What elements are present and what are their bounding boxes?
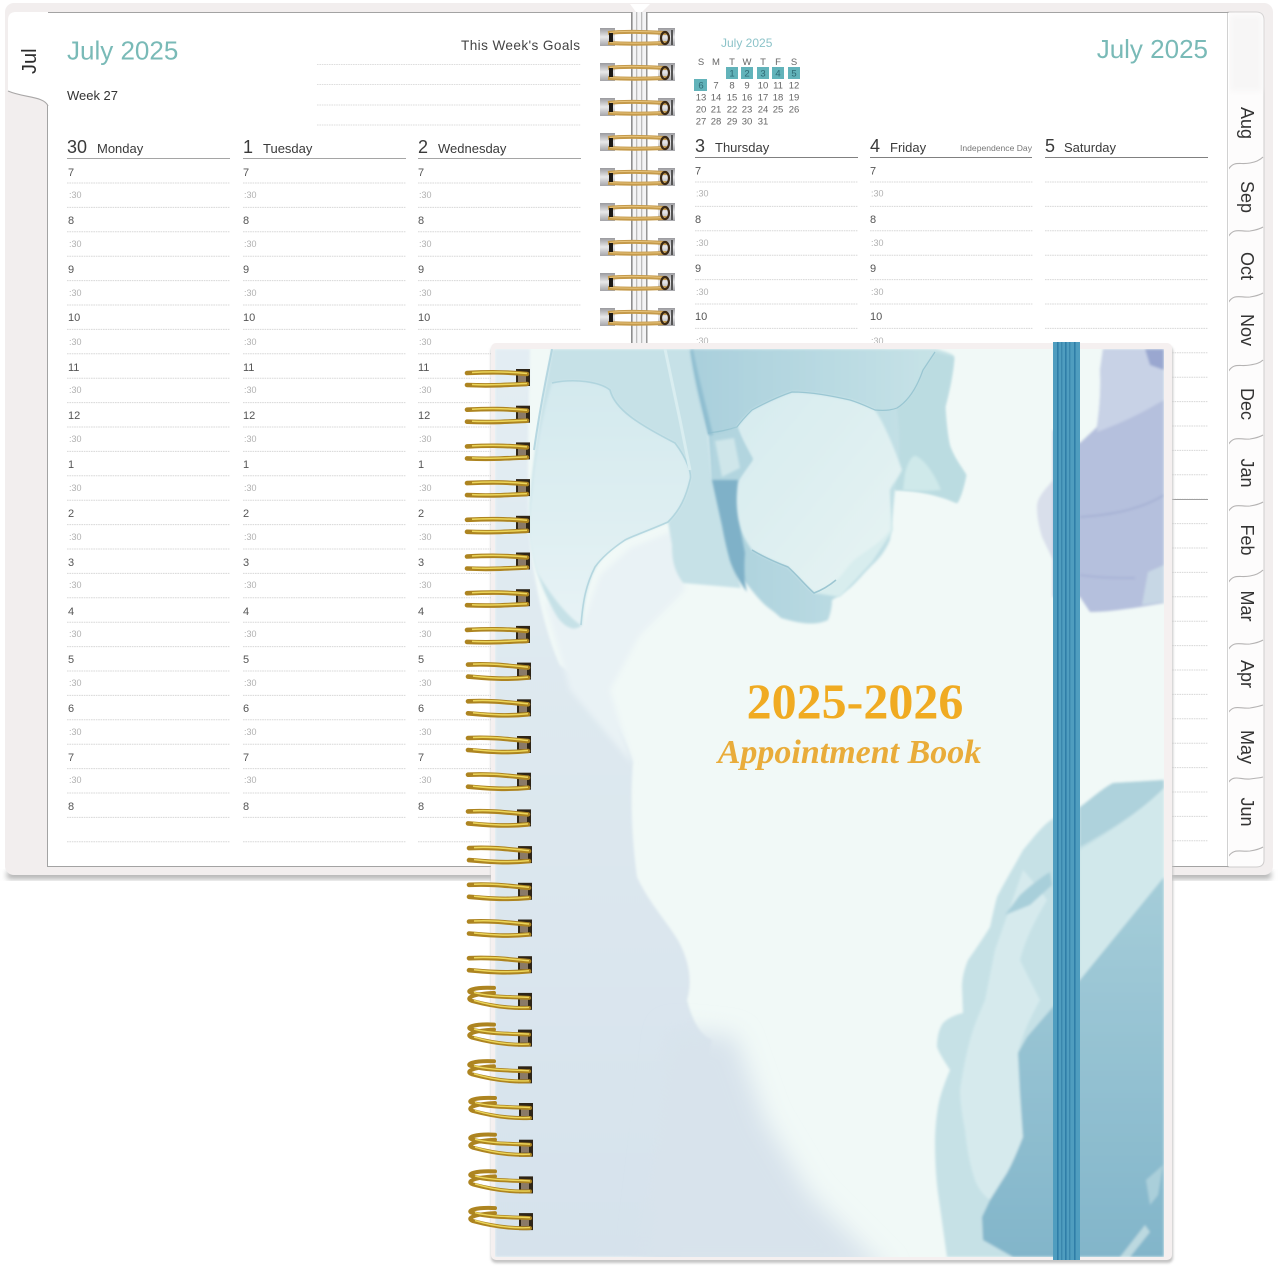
column: Tuesday: :30 (244, 727, 257, 737)
dark teal streak (690, 350, 747, 592)
mini calendar: 30 (742, 116, 752, 128)
Jul tab: Jul (19, 48, 41, 74)
column: Tuesday: 8 (243, 215, 249, 227)
column: Monday: Monday (97, 141, 144, 156)
column: Thursday: :30 (696, 336, 709, 346)
column: Wednesday: :30 (419, 775, 432, 785)
column: Monday: :30 (69, 239, 82, 249)
column: Monday: :30 (69, 727, 82, 737)
mini calendar: 21 (711, 104, 721, 116)
column: Tuesday: Tuesday (263, 141, 313, 156)
column: Monday: 30 (67, 137, 87, 157)
column: Wednesday: 1 (418, 459, 424, 471)
teal wash: central bloom (690, 349, 966, 624)
column: Monday: 4 (68, 606, 74, 618)
column: Tuesday: :30 (244, 288, 257, 298)
column: Thursday: 3 (695, 136, 705, 156)
column: Wednesday: 11 (418, 362, 429, 374)
column: Tuesday: 7 (243, 167, 249, 179)
column: Wednesday: Wednesday (438, 141, 507, 156)
column: Friday: 9 (870, 263, 876, 275)
column: Friday: 4 (870, 136, 880, 156)
tab label: Jan: Jan (1237, 458, 1257, 488)
mini calendar: S (698, 57, 704, 68)
column: Thursday: :30 (696, 188, 709, 198)
mini calendar: 20 (696, 104, 706, 116)
closed planner cover (467, 342, 1173, 1266)
right page (646, 12, 1229, 866)
column: Tuesday: 5 (243, 654, 249, 666)
weekly goals block: This Week's Goals (461, 38, 580, 53)
column: Tuesday: :30 (244, 532, 257, 542)
tab label: Mar: Mar (1237, 590, 1257, 622)
column: Monday: :30 (69, 580, 82, 590)
column: Tuesday: 7 (243, 752, 249, 764)
column: Friday: :30 (871, 336, 884, 346)
column: Wednesday: 3 (418, 557, 424, 569)
column: Thursday: 7 (695, 166, 701, 178)
column: Friday: 8 (870, 214, 876, 226)
mini calendar: 22 (727, 104, 737, 116)
column: Tuesday: 4 (243, 606, 249, 618)
column: Wednesday: :30 (419, 288, 432, 298)
column: Tuesday: :30 (244, 190, 257, 200)
cover subtitle: Appointment Book (716, 734, 981, 771)
planner back cover (5, 3, 1273, 875)
mini calendar: T (729, 57, 735, 68)
column: Monday: :30 (69, 190, 82, 200)
periwinkle wash (1037, 349, 1164, 612)
column: Tuesday: 8 (243, 801, 249, 813)
mini calendar: 23 (742, 104, 752, 116)
column: Wednesday: 12 (418, 410, 430, 422)
mini calendar: July 2025 (721, 36, 773, 50)
column: Wednesday: 2 (418, 137, 428, 157)
column: Friday: Friday (890, 140, 927, 155)
column: Thursday: Thursday (715, 140, 770, 155)
column: Thursday: :30 (696, 238, 709, 248)
column: Monday: 5 (68, 654, 74, 666)
column: Wednesday: :30 (419, 190, 432, 200)
column: Wednesday: 5 (418, 654, 424, 666)
column: Monday: :30 (69, 337, 82, 347)
column: Tuesday: :30 (244, 385, 257, 395)
column: Tuesday: 2 (243, 508, 249, 520)
column: Wednesday: :30 (419, 337, 432, 347)
mini calendar: 6 (698, 80, 704, 92)
column: Monday: :30 (69, 434, 82, 444)
column: Monday: 3 (68, 557, 74, 569)
column: Monday: 11 (68, 362, 79, 374)
mini calendar: T (760, 57, 766, 68)
Jul tab (8, 12, 48, 106)
column: Monday: :30 (69, 532, 82, 542)
weekly goals block (317, 38, 581, 125)
open planner spread (5, 3, 1273, 879)
tab label: Sep: Sep (1237, 181, 1257, 213)
column: Wednesday: 8 (418, 801, 424, 813)
column: Monday: :30 (69, 678, 82, 688)
column: Monday: :30 (69, 629, 82, 639)
column: Tuesday: :30 (244, 775, 257, 785)
column: Monday: 1 (68, 459, 74, 471)
column: Monday: 10 (68, 312, 80, 324)
mini calendar: 19 (789, 92, 799, 104)
column: Monday: 7 (68, 167, 74, 179)
column: Wednesday: :30 (419, 629, 432, 639)
column: Tuesday: 1 (243, 459, 249, 471)
tab label: Jun: Jun (1237, 797, 1257, 827)
mini calendar: 26 (789, 104, 799, 116)
column: Tuesday: :30 (244, 337, 257, 347)
column: Monday: :30 (69, 775, 82, 785)
column: Thursday: 10 (695, 311, 707, 323)
column: Wednesday: :30 (419, 434, 432, 444)
column: Monday: 9 (68, 264, 74, 276)
column: Friday: :30 (871, 188, 884, 198)
mini calendar: 9 (744, 80, 750, 92)
cover spiral binding (467, 369, 533, 1230)
column: Wednesday (418, 137, 581, 842)
teal wash: left bloom (529, 349, 741, 629)
lavender wash (495, 349, 890, 1266)
column: Tuesday: 1 (243, 137, 253, 157)
column: Tuesday: :30 (244, 239, 257, 249)
column: Wednesday: :30 (419, 532, 432, 542)
column: Monday: 2 (68, 508, 74, 520)
column: Tuesday: 3 (243, 557, 249, 569)
column: Tuesday: 11 (243, 362, 254, 374)
mini calendar: 4 (775, 68, 781, 80)
column: Saturday: 5 (1045, 136, 1055, 156)
center gutter (630, 4, 650, 344)
mini calendar: 7 (713, 80, 719, 92)
cover marbled artwork (495, 349, 1164, 1266)
mini calendar: 8 (729, 80, 735, 92)
column: Thursday: :30 (696, 287, 709, 297)
mini calendar: 13 (696, 92, 706, 104)
mini calendar: 24 (758, 104, 768, 116)
mini calendar: M (712, 57, 720, 68)
week label: Week 27 (67, 89, 118, 103)
column: Monday: :30 (69, 288, 82, 298)
month heading: July 2025 (67, 36, 178, 66)
tab label: Apr: Apr (1237, 660, 1257, 688)
column: Tuesday: :30 (244, 580, 257, 590)
month tab column (1228, 12, 1264, 867)
mini calendar: 11 (773, 80, 783, 92)
column: Tuesday: :30 (244, 678, 257, 688)
column: Wednesday: :30 (419, 385, 432, 395)
column: Monday: :30 (69, 385, 82, 395)
mini calendar: 29 (727, 116, 737, 128)
column: Wednesday: :30 (419, 580, 432, 590)
mini calendar: 18 (773, 92, 783, 104)
column: Wednesday: 4 (418, 606, 424, 618)
column: Wednesday: 7 (418, 752, 424, 764)
mini calendar: 14 (711, 92, 721, 104)
column: Tuesday (243, 137, 406, 842)
column: Wednesday: 2 (418, 508, 424, 520)
mini calendar: 1 (729, 68, 735, 80)
column: Wednesday: 8 (418, 215, 424, 227)
mini calendar: 10 (758, 80, 768, 92)
column: Wednesday: :30 (419, 239, 432, 249)
column: Monday: 7 (68, 752, 74, 764)
column: Tuesday: 12 (243, 410, 255, 422)
tab label: May: May (1237, 730, 1257, 764)
mini calendar: 28 (711, 116, 721, 128)
tab label: Aug: Aug (1237, 107, 1257, 139)
column: Tuesday: :30 (244, 483, 257, 493)
column: Monday: :30 (69, 483, 82, 493)
column: Tuesday: :30 (244, 434, 257, 444)
month heading: July 2025 (1097, 34, 1208, 64)
tab label: Oct: Oct (1237, 252, 1257, 280)
mini calendar: 5 (791, 68, 797, 80)
column: Monday: 8 (68, 801, 74, 813)
spreads spiral binding (600, 28, 675, 326)
column: Friday: :30 (871, 287, 884, 297)
column: Tuesday: 9 (243, 264, 249, 276)
column: Saturday (1045, 136, 1208, 841)
column: Friday: 10 (870, 311, 882, 323)
mini calendar: 25 (773, 104, 783, 116)
mini calendar: 27 (696, 116, 706, 128)
mini calendar: 2 (744, 68, 750, 80)
left page (8, 12, 632, 866)
column: Tuesday: :30 (244, 629, 257, 639)
column: Wednesday: 10 (418, 312, 430, 324)
column: Wednesday: 6 (418, 703, 424, 715)
mini calendar: 3 (760, 68, 766, 80)
column: Monday (67, 137, 230, 842)
column: Thursday: 9 (695, 263, 701, 275)
column: Thursday: 8 (695, 214, 701, 226)
column: Monday: 8 (68, 215, 74, 227)
column: Friday: :30 (871, 238, 884, 248)
column: Friday: 7 (870, 166, 876, 178)
column: Wednesday: :30 (419, 483, 432, 493)
cover title: years: 2025-2026 (747, 673, 963, 729)
column: Tuesday: 6 (243, 703, 249, 715)
tab label: Feb: Feb (1237, 524, 1257, 556)
column: Wednesday: 9 (418, 264, 424, 276)
column: Monday: 6 (68, 703, 74, 715)
column: Monday: 12 (68, 410, 80, 422)
column: Friday (870, 136, 1033, 841)
mini calendar: S (791, 57, 797, 68)
tab label: Nov: Nov (1237, 314, 1257, 346)
mini calendar: 31 (758, 116, 768, 128)
mini calendar: W (743, 57, 752, 68)
column: Thursday (695, 136, 858, 841)
mini calendar (694, 36, 800, 128)
column: Wednesday: 7 (418, 167, 424, 179)
column: Wednesday: :30 (419, 727, 432, 737)
mini calendar: F (775, 57, 781, 68)
tab label: Dec: Dec (1237, 388, 1257, 420)
elastic band closure (1053, 342, 1080, 1260)
mini calendar: 12 (789, 80, 799, 92)
mini calendar: 16 (742, 92, 752, 104)
column: Saturday: Saturday (1064, 140, 1117, 155)
holiday note: Independence Day (960, 143, 1033, 153)
column: Wednesday: :30 (419, 678, 432, 688)
teal wash: lower right (935, 780, 1164, 1257)
mini calendar: 17 (758, 92, 768, 104)
mini calendar: 15 (727, 92, 737, 104)
column: Tuesday: 10 (243, 312, 255, 324)
